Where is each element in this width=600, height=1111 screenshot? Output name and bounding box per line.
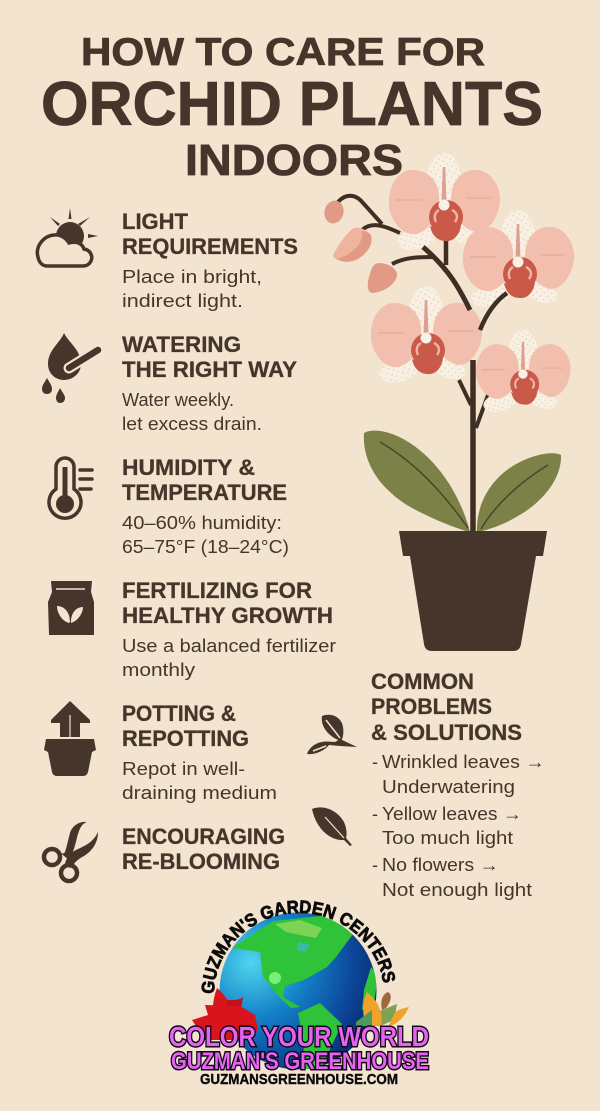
heading [122,209,298,259]
heading [371,669,522,745]
problem list: - [372,752,378,772]
heading: THE RIGHT WAY [122,357,297,382]
orange flower [356,992,409,1027]
section: common problems [307,669,545,900]
slogan: COLOR YOUR WORLD [169,1021,429,1052]
section: watering [42,332,297,434]
section: fertilizing [48,578,336,680]
problem list: Underwatering [382,777,515,797]
icon: sun and cloud [37,208,98,266]
globe [220,912,378,1075]
section: light requirements [37,208,298,311]
body text: Use a balanced fertilizer [122,636,336,656]
flowers [371,153,574,415]
heading [122,455,287,505]
logo: Guzman's Garden Centers [168,900,430,1088]
heading: ENCOURAGING [122,824,285,849]
section: potting [44,701,277,803]
problem list: Wrinkled leaves → [382,752,545,772]
body text: monthly [122,660,195,680]
icon: pot with up arrow [44,701,96,776]
body text [122,636,336,680]
body text: Water weekly. [122,390,234,410]
icon: water drop with dipper [42,333,98,403]
body text [122,759,277,803]
problem list: Not enough light [382,880,532,900]
heading [122,824,285,874]
heading [122,578,333,628]
section: re-blooming [44,822,285,881]
heading: LIGHT [122,209,189,234]
heading: TEMPERATURE [122,480,287,505]
icon: leaf [312,807,352,846]
title: HOW TO CARE FOR [81,31,485,74]
problem list: No flowers → [382,855,499,875]
heading: & SOLUTIONS [371,720,522,745]
problem list: - [372,855,378,875]
stems [338,196,488,532]
section: humidity and temperature [49,455,289,557]
body text: indirect light. [122,291,243,311]
orchid plant illustration [322,153,574,651]
body text: let excess drain. [122,414,262,434]
body text: Repot in well- [122,759,245,779]
icon: fertilizer bag [48,581,94,635]
problem list: - [372,804,378,824]
body text: 40–60% humidity: [122,513,282,533]
problem list [372,752,545,900]
heading: HEALTHY GROWTH [122,603,333,628]
icon: thermometer [49,458,92,518]
body text: draining medium [122,783,277,803]
body text [122,390,262,434]
upper stems over flowers [423,247,507,330]
heading: PROBLEMS [371,694,492,719]
body text: Place in bright, [122,267,262,287]
icon: scissors [44,822,98,881]
arched text: GUZMAN'S GARDEN CENTERS [201,900,396,994]
heading [122,701,249,751]
title [41,31,543,185]
heading: REQUIREMENTS [122,234,298,259]
heading: REPOTTING [122,726,249,751]
body text: 65–75°F (18–24°C) [122,537,289,557]
slogan [169,1021,429,1075]
body text [122,267,262,311]
slogan: GUZMAN'S GREENHOUSE [171,1048,429,1075]
body text [122,513,289,557]
website: GUZMANSGREENHOUSE.COM [200,1071,398,1088]
heading: WATERING [122,332,241,357]
heading: FERTILIZING FOR [122,578,312,603]
heading: POTTING & [122,701,236,726]
icon: leaf sprig [307,715,357,754]
title: ORCHID PLANTS [41,70,543,139]
red flower [192,988,258,1040]
heading: COMMON [371,669,474,694]
leaves [364,431,561,532]
buds [322,198,397,293]
pot [399,531,547,651]
heading: HUMIDITY & [122,455,255,480]
problem list: Yellow leaves → [382,804,522,824]
problem list: Too much light [382,828,513,848]
heading [122,332,297,382]
heading: RE-BLOOMING [122,849,280,874]
title: INDOORS [185,136,403,185]
